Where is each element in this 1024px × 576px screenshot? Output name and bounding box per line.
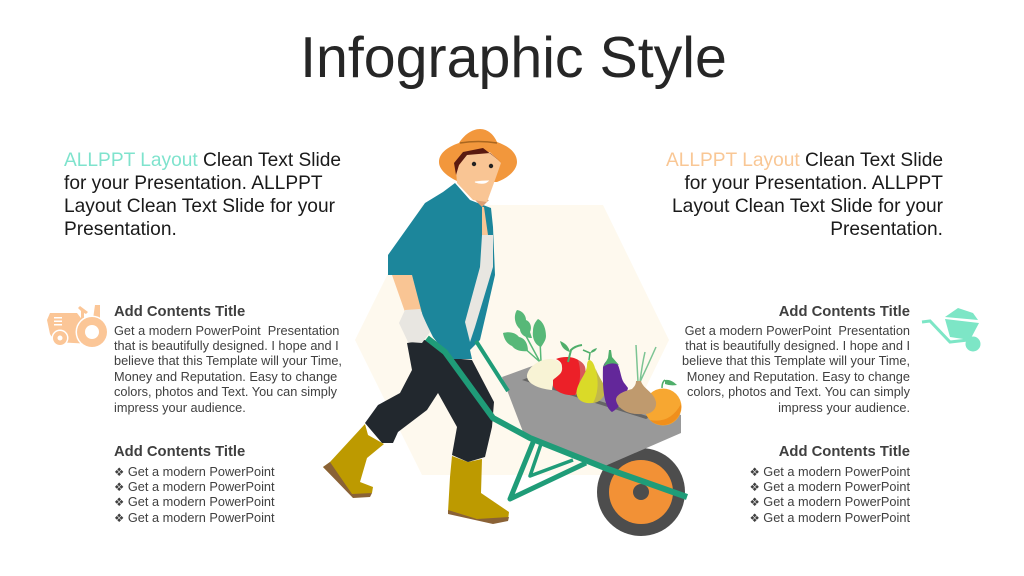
intro text right: for your Presentation. ALLPPT bbox=[684, 172, 943, 194]
body text: right top: Money and Reputation. Easy to change bbox=[687, 369, 910, 384]
body text: left top: colors, photos and Text. You can simply bbox=[114, 384, 337, 399]
body text: right top: that is beautifully designed. I hope and I bbox=[685, 338, 910, 353]
bare arm bbox=[392, 275, 422, 312]
intro text left: Layout Clean Text Slide for your bbox=[64, 196, 335, 216]
heading: right bottom: Add Contents Title bbox=[779, 444, 910, 460]
bullet list: right: ❖ Get a modern PowerPoint bbox=[749, 510, 910, 525]
hat band bbox=[460, 142, 497, 143]
intro text right: Layout Clean Text Slide for your bbox=[672, 196, 943, 216]
vegetable group bbox=[503, 310, 682, 426]
hat bbox=[439, 129, 517, 182]
apple bbox=[553, 341, 585, 395]
bullet list: right bbox=[749, 464, 910, 525]
heading: left top: Add Contents Title bbox=[114, 304, 245, 320]
body text: right top bbox=[682, 322, 910, 415]
beet greens bbox=[503, 310, 546, 362]
shirt bbox=[388, 183, 495, 359]
neck bbox=[473, 198, 489, 207]
glove bbox=[399, 309, 430, 343]
bullet list: left bbox=[114, 464, 275, 525]
icon: wheelbarrow bbox=[922, 308, 980, 352]
intro text left bbox=[64, 150, 341, 240]
bullet list: left: ❖ Get a modern PowerPoint bbox=[114, 510, 275, 525]
body text: right top: believe that this Template will your Time, bbox=[682, 353, 910, 368]
intro text right: Presentation. bbox=[830, 218, 943, 240]
icon: tractor bbox=[47, 305, 108, 348]
right boot bbox=[448, 456, 509, 524]
eyes and smile bbox=[472, 162, 493, 183]
bullet list: right: ❖ Get a modern PowerPoint bbox=[749, 494, 910, 509]
body text: left top: Money and Reputation. Easy to change bbox=[114, 369, 337, 384]
body text: right top: impress your audience. bbox=[778, 400, 910, 415]
bullet list: right: ❖ Get a modern PowerPoint bbox=[749, 464, 910, 478]
face bbox=[456, 152, 501, 202]
bullet list: left: ❖ Get a modern PowerPoint bbox=[114, 464, 275, 478]
body text: left top: Get a modern PowerPoint Presentation bbox=[114, 322, 339, 338]
hair bbox=[454, 148, 501, 175]
intro text right bbox=[666, 150, 943, 240]
background hexagon bbox=[355, 205, 669, 475]
title: Infographic Style bbox=[300, 26, 727, 90]
left boot bbox=[323, 424, 384, 498]
wheelbarrow tray bbox=[502, 365, 681, 466]
trousers bbox=[365, 340, 494, 462]
bullet list: left: ❖ Get a modern PowerPoint bbox=[114, 494, 275, 509]
undershirt bbox=[465, 235, 493, 342]
bullet list: left: ❖ Get a modern PowerPoint bbox=[114, 479, 275, 494]
orange bbox=[644, 380, 682, 426]
bullet list: right: ❖ Get a modern PowerPoint bbox=[749, 479, 910, 494]
intro text left: for your Presentation. ALLPPT bbox=[64, 172, 323, 194]
onion bbox=[616, 345, 656, 414]
heading: right top: Add Contents Title bbox=[779, 304, 910, 320]
body text: left top: that is beautifully designed. I hope and I bbox=[114, 338, 339, 353]
body text: left top: believe that this Template will your Time, bbox=[114, 353, 342, 368]
intro text right: ALLPPT Layout Clean Text Slide bbox=[666, 150, 943, 170]
body text: right top: Get a modern PowerPoint Presentation bbox=[685, 322, 910, 338]
body text: right top: colors, photos and Text. You can simply bbox=[687, 384, 910, 399]
heading: left bottom: Add Contents Title bbox=[114, 444, 245, 460]
farmer bbox=[323, 129, 517, 524]
body text: left top bbox=[114, 322, 342, 415]
eggplant bbox=[603, 350, 628, 412]
body text: left top: impress your audience. bbox=[114, 400, 246, 415]
turnip bbox=[527, 359, 562, 390]
pear bbox=[576, 348, 605, 403]
chest skin bbox=[482, 207, 488, 235]
intro text left: ALLPPT Layout Clean Text Slide bbox=[64, 150, 341, 170]
intro text left: Presentation. bbox=[64, 218, 177, 240]
wheelbarrow wheel bbox=[597, 448, 685, 536]
wheelbarrow frame bbox=[427, 338, 687, 497]
wheelbarrow legs bbox=[510, 440, 586, 499]
